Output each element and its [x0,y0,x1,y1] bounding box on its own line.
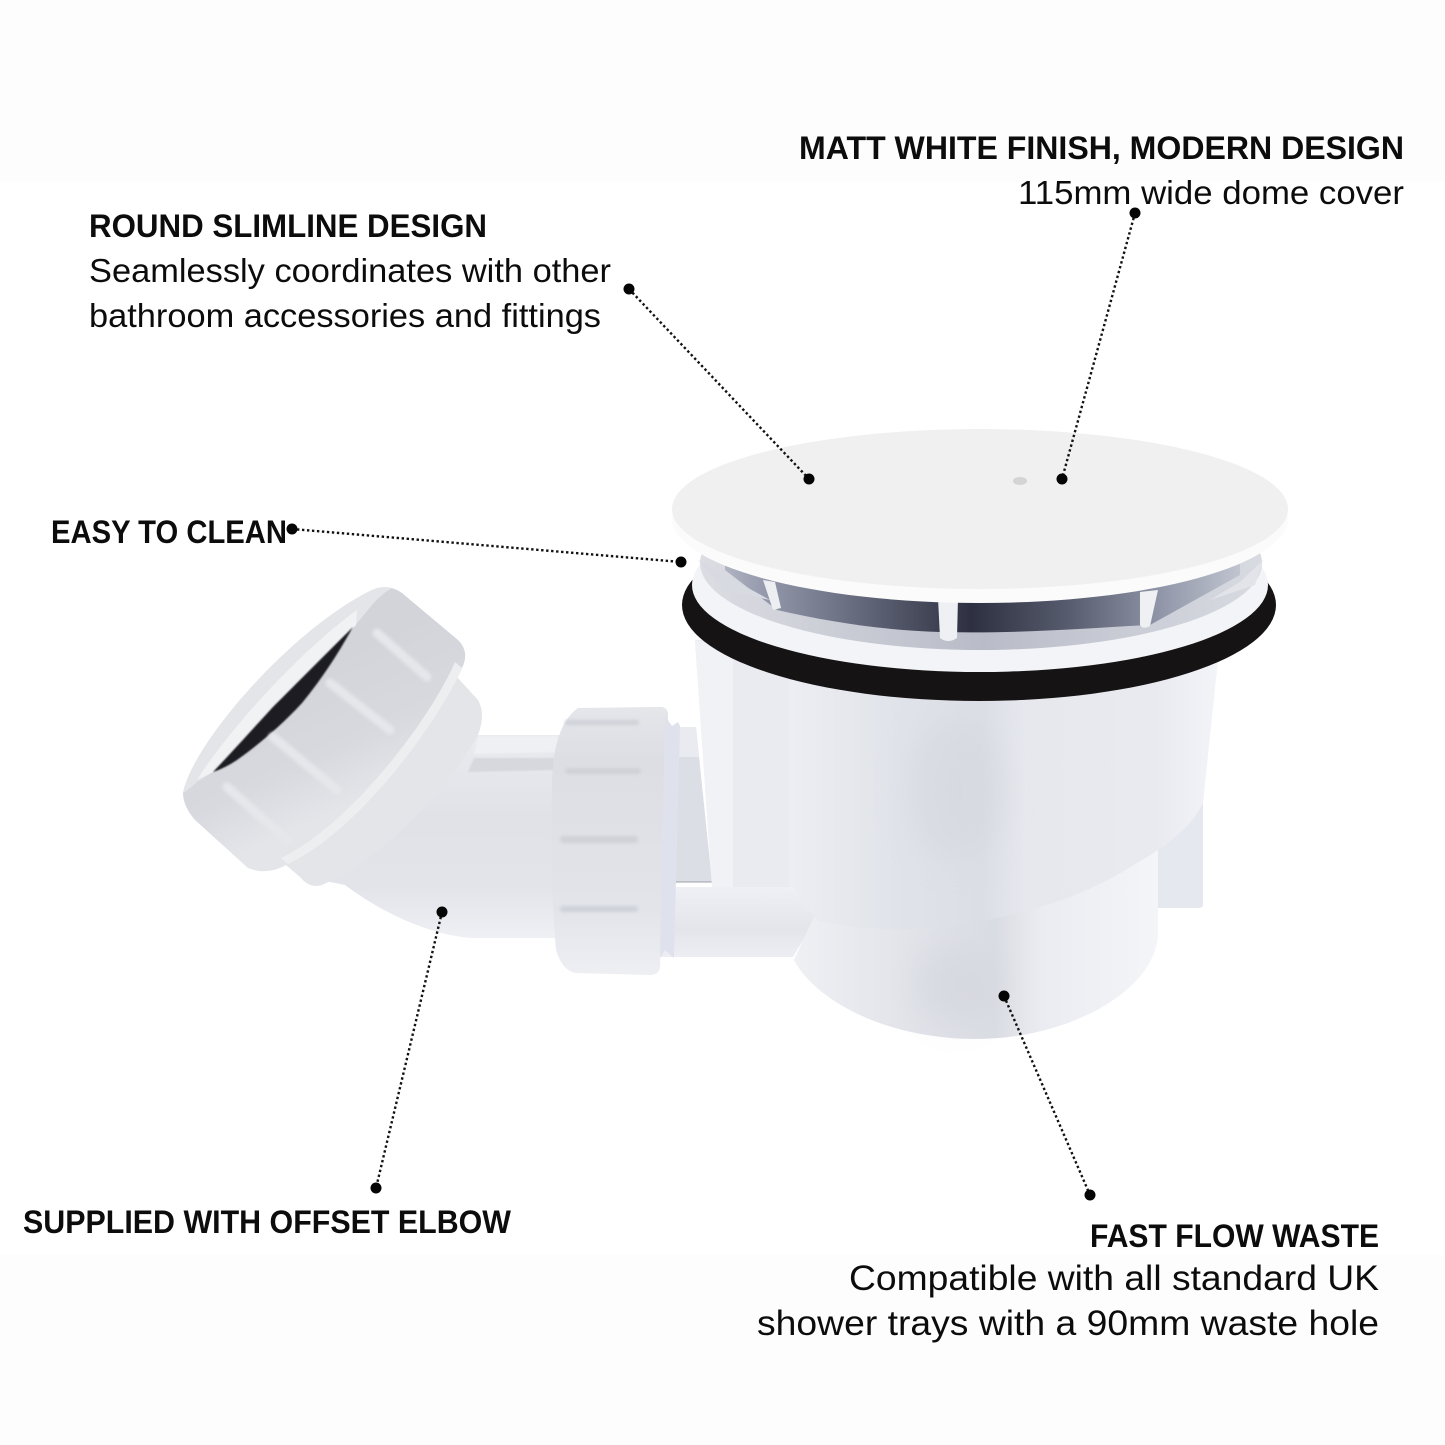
nut ridges [227,633,427,840]
body flange [695,640,800,887]
elbow pipe [320,735,560,938]
callout: fast flow waste: shower trays with a 90mm waste hole [757,1304,1379,1343]
product illustration: shower waste [183,429,1288,1039]
threaded ring [660,716,680,958]
callout: easy to clean: EASY TO CLEAN [51,514,287,550]
callout: matt white finish: MATT WHITE FINISH, MODERN DESIGN [799,130,1404,166]
callout: round slimline design: bathroom accessories and fittings [89,297,601,334]
collar behind angled nut [280,677,482,886]
grey slots under dome [698,476,1263,650]
dark seal opening [213,627,353,772]
front rim [183,587,392,793]
callout: fast flow waste [757,1218,1379,1343]
inner wall [197,610,357,780]
callout: fast flow waste: Compatible with all standard UK [849,1259,1379,1298]
lower offset pipe [660,887,817,957]
dome support ribs [763,580,781,610]
dome cover [672,429,1288,603]
callout: round slimline design: Seamlessly coordinates with other [89,252,611,289]
nut body [183,587,465,871]
callout: matt white finish: 115mm wide dome cover [1018,174,1404,211]
leader: fast flow waste [998,990,1096,1200]
callout: fast flow waste: FAST FLOW WASTE [1090,1218,1379,1254]
leader: offset elbow [370,906,448,1194]
white flange plate [692,498,1268,672]
screw hole [1013,477,1027,485]
leader: round slimline design [624,284,814,484]
pipe panel between ring and flange [676,727,712,882]
callout: matt white finish [799,130,1404,211]
straight compression nut [552,707,680,975]
main cylinder [789,660,1218,929]
leader: easy to clean [286,524,686,568]
right bracket [1150,800,1203,908]
callout: supplied with offset elbow: SUPPLIED WITH OFFSET ELBOW [23,1204,512,1240]
callout: round slimline design: ROUND SLIMLINE DESIGN [89,208,487,244]
leader: matt white finish [1056,208,1140,484]
angled compression nut [183,587,465,871]
black sealing ring [682,509,1276,701]
callout: round slimline design [89,208,611,334]
lower cylinder [794,850,1158,1039]
